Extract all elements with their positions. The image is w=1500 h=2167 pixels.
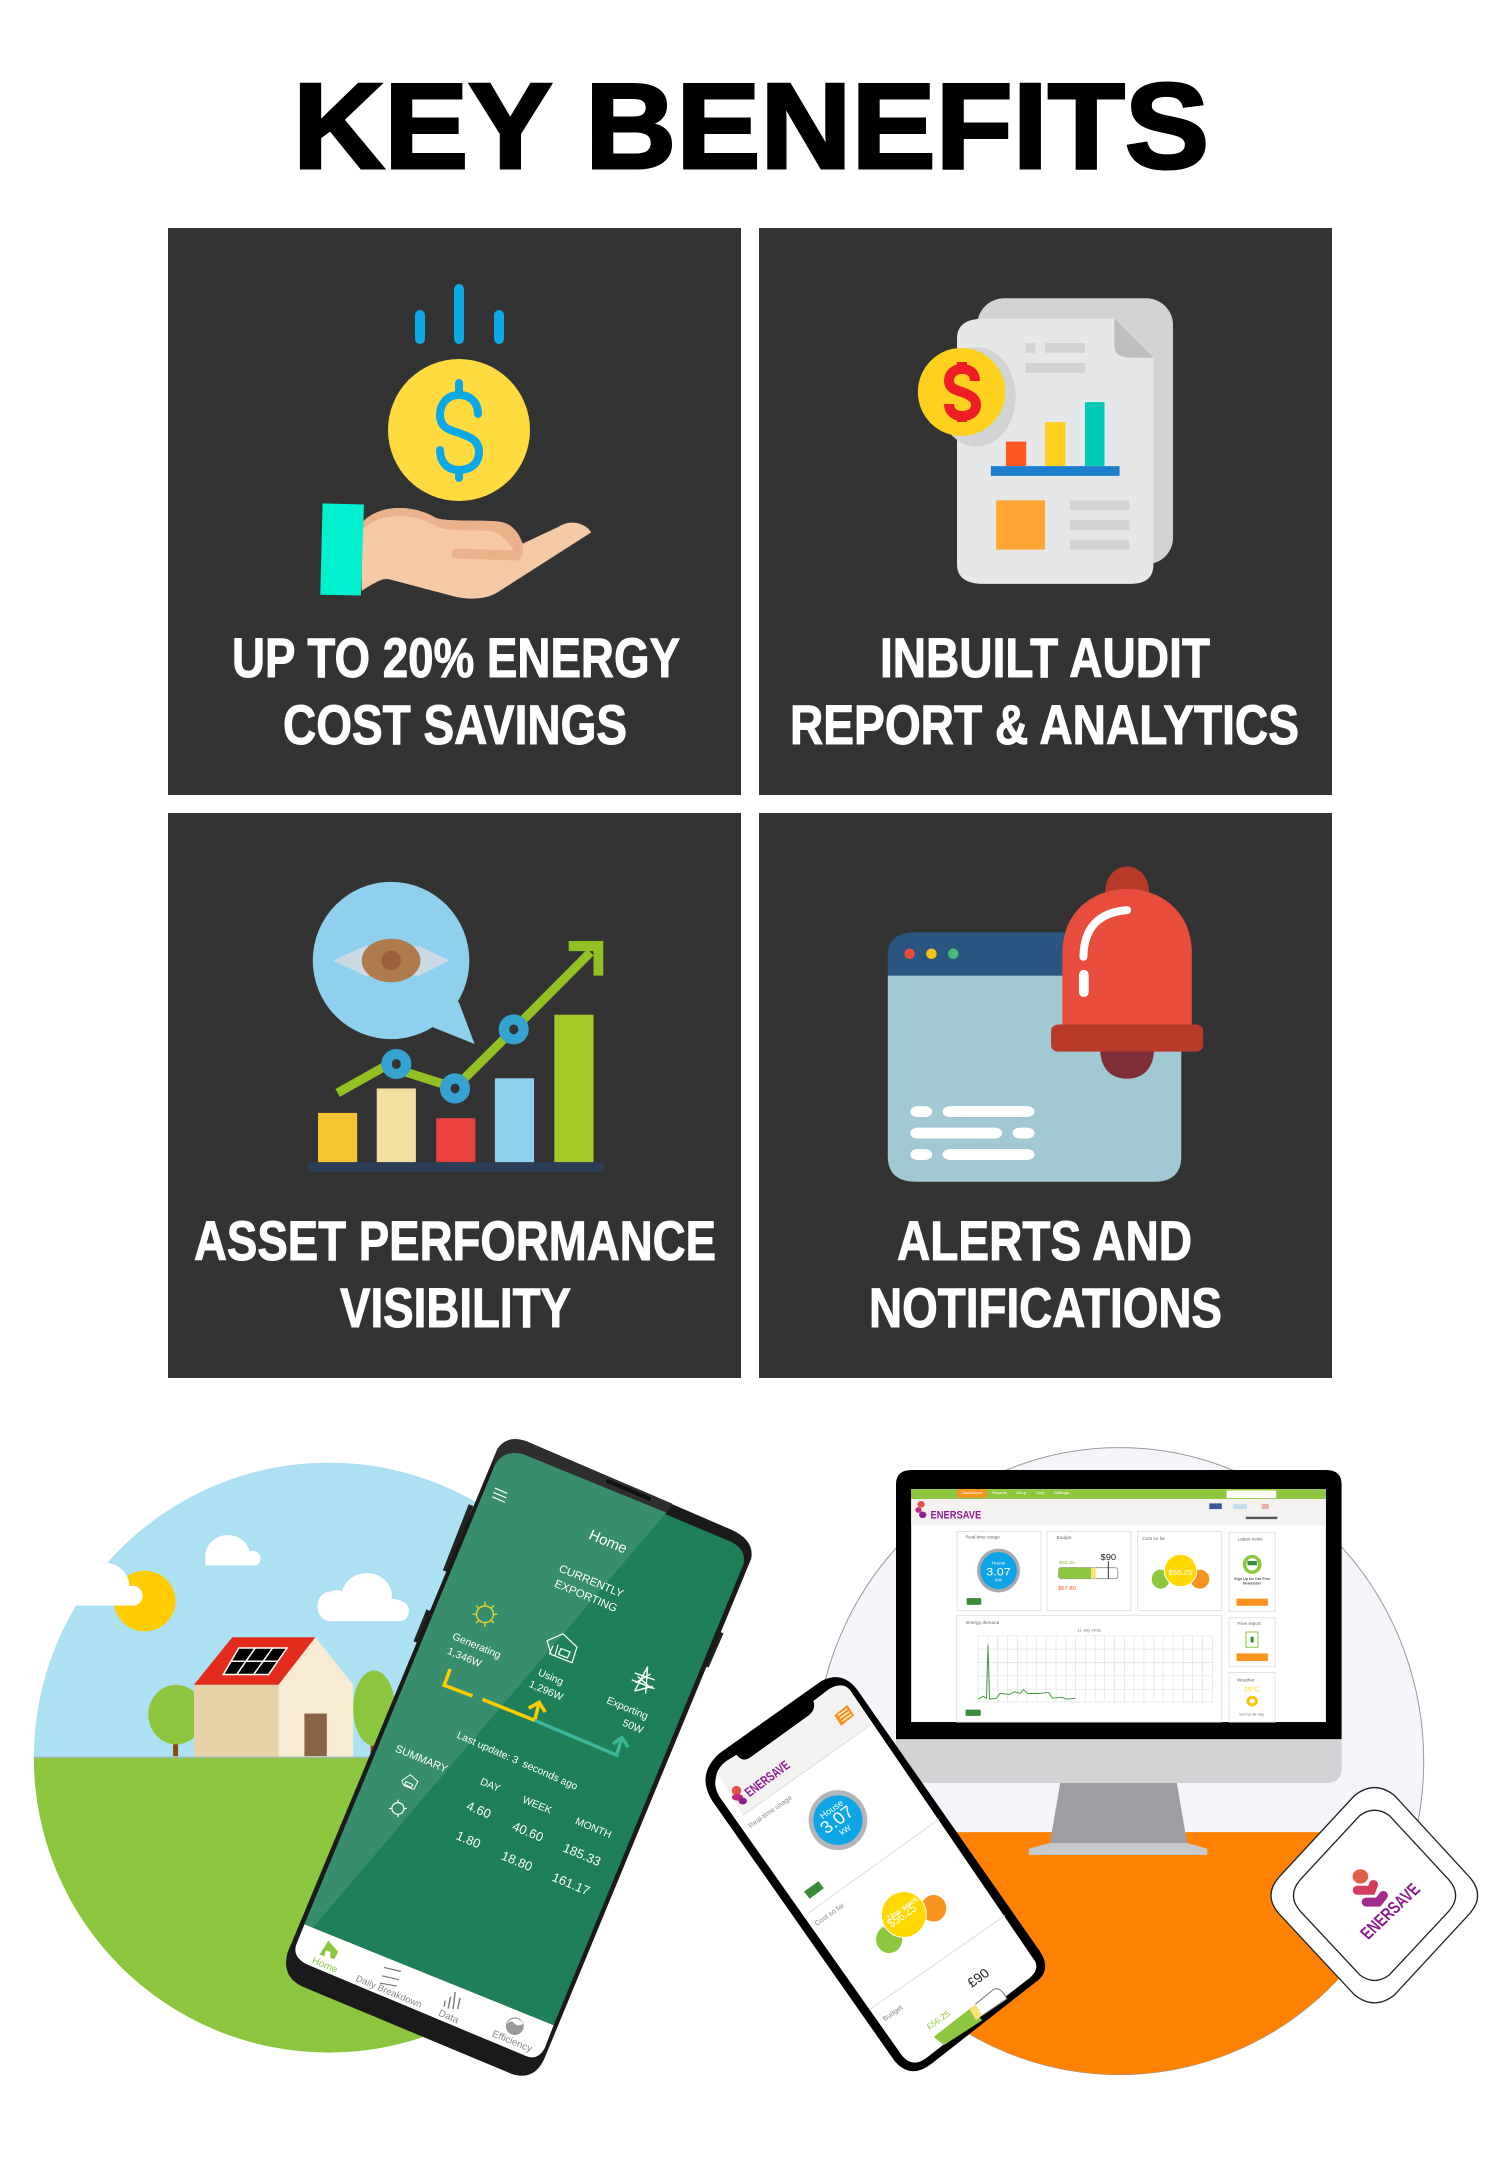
phone top glare [492,1439,672,1513]
app text: power stats: 1,346W [445,1646,483,1670]
app text: summary table: MONTH [573,1816,613,1841]
small phone gauge: House [818,1798,845,1821]
screen: dashboard: Latest news [1238,1537,1263,1541]
small phone labels: Real-time usage [747,1795,794,1830]
icon: browser window with bell [888,866,1203,1182]
screen: dashboard: Shop [1016,1490,1027,1495]
icon: trees [148,1671,395,1756]
monitor bezel [896,1470,1342,1739]
app text: power stats: 50W [621,1718,645,1736]
app nav: efficiency [490,2017,534,2055]
icon: large cloud [30,1563,143,1605]
app text: power stats: Generating [450,1631,503,1661]
app icon: house outline [547,1634,577,1663]
budget bar: $67.80 [1058,1586,1076,1592]
monitor base [1029,1843,1207,1855]
screen: dashboard: Real-time usage [966,1535,1000,1540]
panel: asset performance [168,813,741,1378]
small phone labels: Cost so far [814,1902,847,1927]
app text: summary table: 40.60 [510,1819,546,1845]
news widget: Sign Up for Our Free [1234,1577,1270,1581]
small phone screen [715,1685,1036,2063]
small phone bubbles: $56.25 [884,1901,919,1930]
line chart [966,1628,1212,1716]
screen: dashboard: Help [1036,1490,1046,1495]
news widget: Newsletter [1243,1582,1262,1585]
report widget [1236,1632,1268,1661]
circle backdrop [815,1448,1424,2075]
monitor stand [1050,1783,1187,1844]
screen: dashboard [911,1489,1326,1722]
heading: energy cost savings: UP TO 20% ENERGY [232,626,680,689]
small smartphone [705,1668,1045,2071]
phone screen highlight [304,1453,667,1928]
app text: summary table: 161.17 [550,1869,592,1898]
gauge: kW [995,1578,1003,1582]
app text: currently exporting: CURRENTLY [557,1563,626,1601]
small phone bubbles: This week [885,1894,921,1923]
screen: dashboard: Free report [1238,1621,1262,1626]
gauge: House [992,1561,1006,1565]
line chart: 11 July 2018 [1077,1628,1101,1632]
icon: eye bubble and growth chart [308,882,603,1172]
illustration: house scene and mobile app [30,1439,752,2076]
heading: audit report: REPORT & ANALYTICS [790,693,1299,756]
gauge: 3.07 [986,1565,1011,1578]
app nav: efficiency: Efficiency [490,2029,534,2055]
title: KEY BENEFITS [293,58,1209,194]
app text: summary table: 185.33 [561,1840,603,1869]
app text: summary table: Last update: 3 seconds ago [455,1730,579,1793]
screen: dashboard: Budget [1057,1535,1072,1540]
screen: dashboard: Energy demand [966,1620,1000,1625]
device logo mark [1353,1869,1383,1902]
heading: alerts: ALERTS AND [897,1209,1192,1272]
panel: energy cost savings [168,228,741,795]
small phone body [705,1677,1045,2071]
app text: power stats [445,1631,650,1736]
panel: audit report [759,228,1332,795]
small phone logo [732,1758,793,1804]
panel: alerts [759,813,1332,1378]
gauge [967,1549,1020,1605]
small phone budget bar: £90 [964,1966,992,1990]
app nav: data: Data [437,2008,461,2026]
app text: summary table: DAY [478,1777,502,1795]
small phone header [717,1685,870,1815]
small phone labels [747,1795,905,2023]
app text: currently exporting: EXPORTING [552,1578,619,1615]
weather widget [1239,1686,1264,1716]
phone nav bar [295,1924,554,2057]
phone speaker [607,1481,651,1499]
bubbles: $56.25 [1169,1568,1193,1577]
dashboard logo: ENERSAVE [931,1508,981,1521]
heading: audit report [790,626,1299,756]
app chart: energy flow lines [444,1669,628,1755]
heading: alerts [869,1209,1222,1339]
heading: asset performance: VISIBILITY [340,1276,571,1339]
app text: summary table: 1.80 [454,1828,483,1851]
weather widget: Sunny all day [1239,1712,1264,1716]
app icon: menu [492,1488,507,1502]
dashboard cards [957,1531,1275,1722]
small phone dividers [743,1725,1005,2010]
app text: power stats: Using [536,1668,565,1688]
app nav: daily breakdown: Daily Breakdown [354,1973,423,2010]
icon: small cloud [205,1535,261,1565]
monitor chin [896,1739,1342,1783]
budget bar: $56.25 [1059,1560,1075,1566]
news widget [1234,1555,1270,1606]
phone: app on large smartphone [286,1439,752,2076]
monitor [896,1470,1342,1855]
dashboard logo [915,1501,981,1521]
small phone budget bar [924,1966,1007,2045]
app icon: summary house and sun [389,1775,418,1817]
small phone budget bar: £56.25 [924,2008,952,2031]
heading: energy cost savings [232,626,680,756]
heading: asset performance [194,1209,716,1339]
small phone labels: Budget [882,2004,905,2023]
icon: hand holding coin [320,284,591,599]
weather widget: 25°C [1244,1686,1260,1693]
app icon: sun outline [473,1602,497,1627]
icon: wide cloud [318,1573,409,1621]
icon: red dollar sign [949,362,976,422]
screen: dashboard: Reports [992,1490,1007,1495]
app text: summary table: SUMMARY [393,1743,449,1775]
app text: home header: Home [586,1527,629,1557]
device: energy monitor unit [1271,1788,1478,2003]
icon: house with solar panels [194,1637,353,1757]
app text: currently exporting [552,1563,626,1615]
small phone gauge: kW [838,1823,853,1837]
heading: asset performance: ASSET PERFORMANCE [194,1209,716,1272]
small phone gauge [809,1790,867,1850]
device logo text: ENERSAVE [1356,1880,1424,1943]
phone body [286,1439,752,2076]
app text: summary table: WEEK [521,1795,553,1817]
scene: sky and ground circle [34,1463,624,2053]
app text: power stats: 1,296W [527,1679,565,1703]
small phone button [804,1881,824,1899]
app nav: home: Home [310,1955,339,1976]
screen: dashboard: Settings [1054,1490,1069,1495]
app text: power stats: Exporting [605,1696,650,1723]
screen: dashboard: Dashboard [962,1490,982,1495]
app nav: home [310,1941,339,1976]
small phone gauge: 3.07 [816,1802,858,1837]
heading: energy cost savings: COST SAVINGS [283,693,627,756]
screen: dashboard: Weather [1237,1678,1255,1682]
illustration: desktop, mobile and device [705,1448,1478,2075]
phone side buttons [416,1505,721,1667]
small phone logo: ENERSAVE [742,1758,793,1800]
app icon: pylon [632,1667,655,1694]
budget bar: $90 [1100,1552,1116,1562]
bubbles [1151,1554,1210,1589]
small phone bubbles [876,1892,947,1954]
screen: dashboard: Cost so far [1142,1536,1166,1541]
icon: report with chart [918,298,1173,584]
app nav: data [437,1992,461,2026]
app text: summary table [393,1730,613,1898]
phone screen [304,1453,744,2025]
heading: alerts: NOTIFICATIONS [869,1276,1222,1339]
budget bar [1058,1552,1118,1592]
small phone menu icon [834,1705,854,1726]
heading: audit report: INBUILT AUDIT [880,626,1210,689]
app text: summary table: 18.80 [499,1848,535,1874]
icon: sun [114,1571,176,1631]
app text: summary table: 4.60 [464,1798,493,1821]
